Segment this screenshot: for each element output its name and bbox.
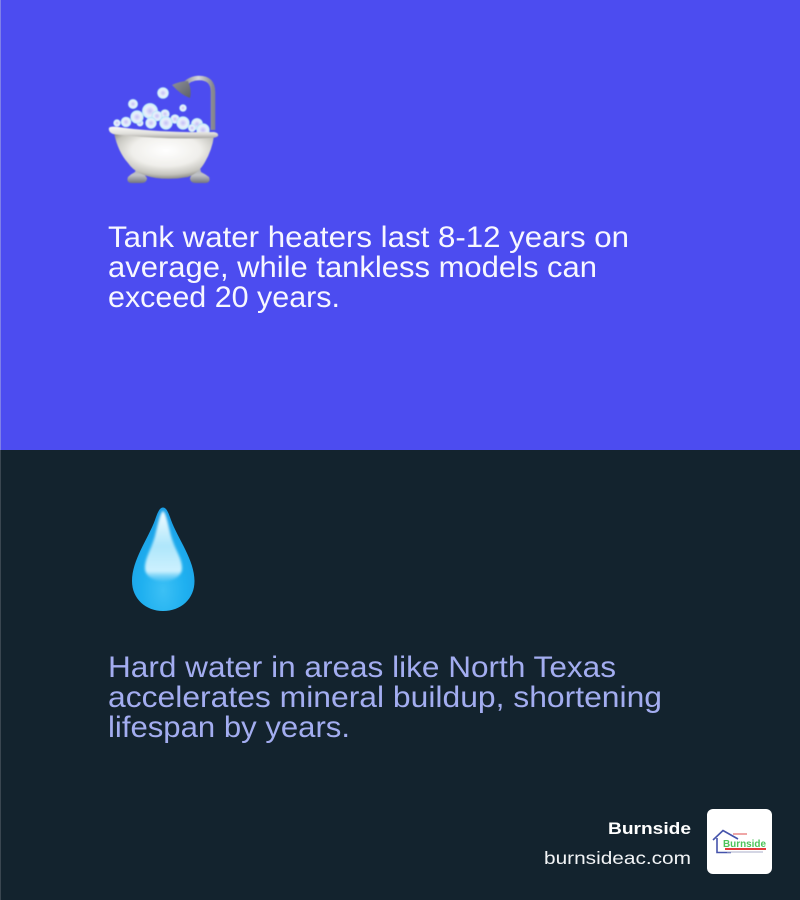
brand website: burnsideac.com (544, 848, 691, 868)
panel: tank lifespan fact (0, 0, 800, 450)
panel: hard water fact (0, 450, 800, 900)
icon: bathtub with bubbles (109, 78, 218, 183)
text: tank water heaters fact: Tank water heaters last 8-12 years on (108, 221, 629, 254)
logo card (707, 809, 772, 874)
text: hard water fact (108, 651, 662, 744)
icon: water drop (132, 508, 194, 611)
text: hard water fact: lifespan by years. (108, 711, 350, 744)
text: hard water fact: Hard water in areas like North Texas (108, 651, 616, 684)
brand name: Burnside (608, 819, 691, 838)
text: hard water fact: accelerates mineral buildup, shortening (108, 681, 662, 714)
text: tank water heaters fact (108, 221, 629, 314)
logo card: Burnside (723, 838, 766, 850)
text: tank water heaters fact: average, while tankless models can (108, 251, 597, 284)
text: tank water heaters fact: exceed 20 years. (108, 281, 340, 314)
